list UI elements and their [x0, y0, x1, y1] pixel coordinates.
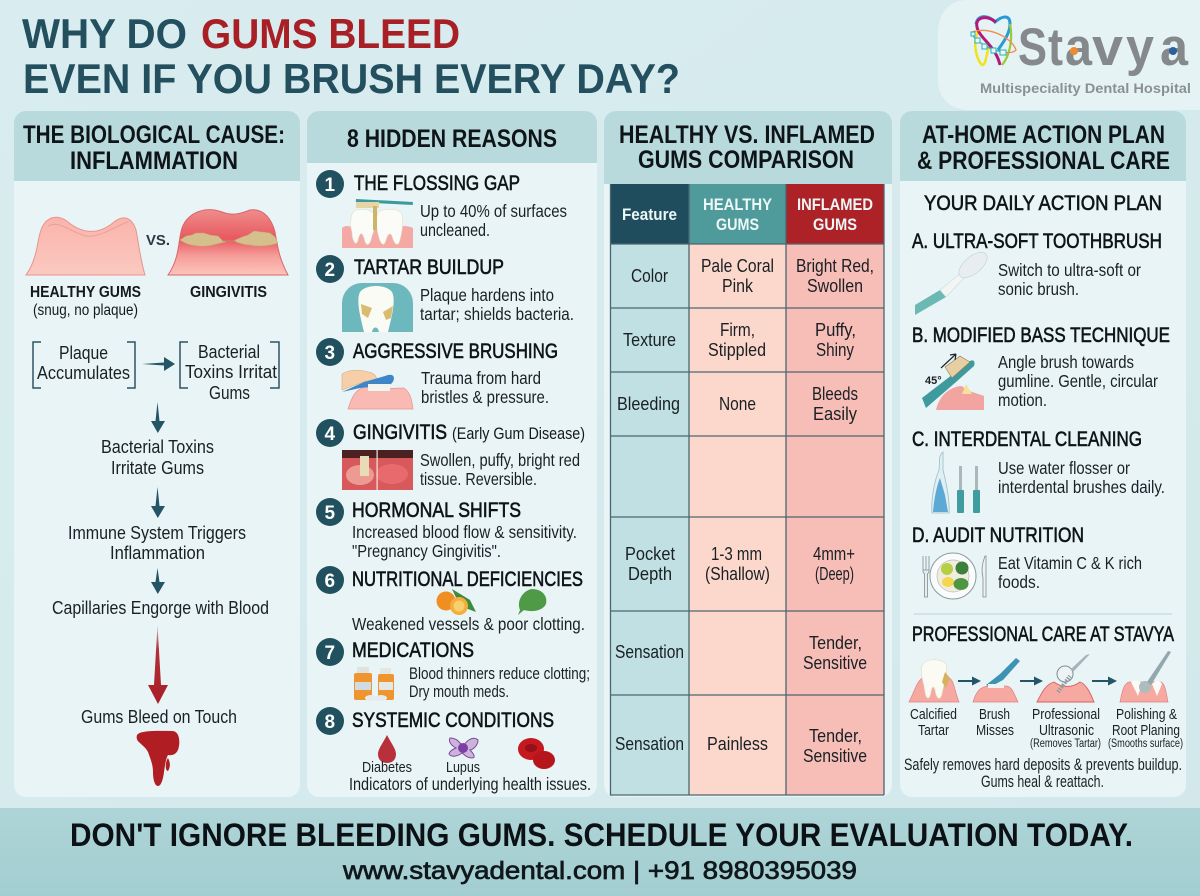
icon: brush at 45 degrees: 45°: [925, 375, 942, 387]
panel: the biological cause: [14, 111, 300, 797]
logo: Stavya Multispeciality Dental Hospital: t: [1048, 18, 1063, 77]
icon: brush at 45 degrees: [922, 354, 984, 410]
icon: blood drip: [137, 731, 179, 786]
icon: spinach: [518, 589, 546, 615]
arrow: down 2: [151, 487, 165, 518]
subheading: your daily action plan: YOUR DAILY ACTION PLAN: [924, 192, 1162, 215]
row: pocket depth: (Shallow): [705, 563, 770, 584]
heading: comparison: GUMS COMPARISON: [638, 146, 854, 174]
photo: inflamed gums: [342, 450, 413, 490]
text: immune system triggers inflammation: [68, 522, 246, 563]
text: capillaries engorge with blood: Capillaries Engorge with Blood: [52, 597, 269, 618]
title: [22, 10, 680, 102]
step 4: polishing and root planing: [1108, 651, 1183, 750]
step 3: professional ultrasonic: Ultrasonic: [1039, 722, 1094, 739]
reason 2: tartar buildup: [316, 255, 574, 332]
row: pocket depth: [625, 543, 855, 584]
row: sensation 2: Painless: [707, 733, 768, 754]
reason 7: medications: Dry mouth meds.: [409, 683, 509, 701]
arrow: to bacterial toxins: [142, 357, 175, 371]
icon: oranges: [436, 589, 476, 615]
row: bleeding: [617, 383, 858, 424]
row: color: Pink: [722, 275, 754, 296]
reason 5: hormonal shifts: "Pregnancy Gingivitis".: [352, 541, 501, 561]
step 4: polishing and root planing: Root Planing: [1112, 722, 1180, 739]
logo: Stavya Multispeciality Dental Hospital: [938, 0, 1200, 110]
row: texture: Texture: [623, 329, 676, 350]
row: bleeding: Bleeding: [617, 393, 680, 414]
step C: interdental cleaning: interdental brushes daily.: [998, 477, 1165, 497]
label: healthy gums: [30, 284, 141, 319]
table header row: HEALTHY: [703, 195, 773, 214]
step A: ultra-soft toothbrush: Switch to ultra-soft or: [998, 260, 1141, 280]
arrow: down 1: [151, 402, 165, 433]
row: pocket depth: 4mm+: [813, 543, 855, 564]
text: bacterial toxins irritate gums: Bacterial Toxins: [101, 436, 214, 457]
row: sensation 1: [615, 632, 867, 673]
step 3: professional ultrasonic: [1030, 654, 1101, 750]
heading: 8 hidden reasons: [307, 111, 597, 163]
step 4: polishing and root planing: (Smooths surface): [1108, 738, 1183, 750]
table header row: Feature: [622, 205, 677, 224]
text: professional care summary: Gums heal & reattach.: [981, 773, 1104, 791]
heading: the biological cause: INFLAMMATION: [70, 147, 238, 175]
logo: Stavya Multispeciality Dental Hospital: a: [1065, 18, 1092, 77]
reason 1: the flossing gap: uncleaned.: [420, 220, 490, 240]
step B: modified bass technique: [912, 324, 1170, 410]
flow box: plaque accumulates: Plaque: [59, 342, 108, 363]
arrow: step 1 to 2: [958, 676, 981, 686]
reason 1: the flossing gap: [316, 170, 567, 248]
footer call to action: [0, 808, 1200, 896]
icon: toothbrush: [915, 248, 991, 315]
icon: teeth and brush: [342, 199, 413, 248]
row: color: Pale Coral: [701, 255, 774, 276]
row: texture: Shiny: [816, 339, 855, 360]
reason 4: gingivitis: 4: [324, 424, 336, 445]
reason 2: tartar buildup: tartar; shields bacteria.: [420, 304, 574, 324]
reason 2: tartar buildup: 2: [324, 260, 335, 281]
reason 8: systemic conditions: 8: [324, 712, 335, 733]
reason 5: hormonal shifts: HORMONAL SHIFTS: [352, 499, 521, 522]
reason 7: medications: MEDICATIONS: [352, 639, 474, 662]
icon: lupus cell: [449, 738, 478, 758]
comparison table: [610, 184, 884, 795]
illustration: healthy gums: [26, 217, 145, 275]
flow box: plaque accumulates: Accumulates: [37, 362, 130, 383]
step 4: polishing and root planing: Polishing &: [1116, 706, 1177, 723]
logo: Stavya Multispeciality Dental Hospital: Multispeciality Dental Hospital: [980, 81, 1191, 96]
row: pocket depth: Depth: [628, 563, 672, 584]
text: bacterial toxins irritate gums: [101, 436, 214, 478]
step 2: brush misses: Brush: [979, 706, 1010, 723]
text: immune system triggers inflammation: Inflammation: [110, 542, 205, 563]
reason 3: aggressive brushing: [316, 338, 558, 409]
logo: Stavya Multispeciality Dental Hospital: v: [1092, 18, 1124, 77]
reason 8: systemic conditions: Lupus: [446, 759, 480, 776]
reason 8: systemic conditions: [316, 707, 591, 794]
label: healthy gums: (snug, no plaque): [33, 302, 138, 319]
row: sensation 2: [615, 725, 867, 766]
reason 7: medications: Blood thinners reduce clotting;: [409, 665, 590, 683]
reason 7: medications: [316, 638, 590, 701]
icon: hand brushing gums: [342, 370, 413, 409]
step 3: professional ultrasonic: Professional: [1032, 706, 1100, 723]
text: gums bleed on touch: Gums Bleed on Touch: [81, 706, 237, 727]
step D: audit nutrition: D. AUDIT NUTRITION: [912, 524, 1084, 547]
logo: Stavya Multispeciality Dental Hospital: S: [1018, 18, 1047, 77]
row: pocket depth: Pocket: [625, 543, 675, 564]
reason 8: systemic conditions: SYSTEMIC CONDITIONS: [352, 709, 554, 732]
row: color: Color: [631, 265, 668, 286]
text: bacterial toxins irritate gums: Irritate Gums: [111, 457, 204, 478]
step C: interdental cleaning: [912, 428, 1165, 513]
flow box: bacterial toxins irritate gums: Toxins Irritat: [185, 361, 277, 382]
heading: comparison: HEALTHY VS. INFLAMED: [619, 121, 875, 149]
table header row: INFLAMED: [797, 195, 873, 214]
row: texture: [623, 319, 856, 360]
arrow: step 2 to 3: [1020, 676, 1043, 686]
flow box: plaque accumulates: [33, 342, 135, 388]
reason 2: tartar buildup: TARTAR BUILDUP: [354, 256, 504, 279]
label: vs: VS.: [146, 232, 170, 249]
row: sensation 2: Sensation: [615, 733, 684, 754]
reason 7: medications: 7: [324, 643, 335, 664]
row: color: Swollen: [807, 275, 863, 296]
row: texture: Stippled: [708, 339, 766, 360]
panel: at-home action plan and professional care: [900, 111, 1186, 797]
table header row: [610, 184, 884, 244]
step 1: calcified tartar: Tartar: [918, 722, 949, 739]
reason 3: aggressive brushing: 3: [324, 343, 335, 364]
icon: plate with fork and knife: [923, 553, 986, 599]
reason 3: aggressive brushing: Trauma from hard: [421, 368, 541, 388]
reason 4: gingivitis: Swollen, puffy, bright red: [420, 450, 580, 470]
step D: audit nutrition: foods.: [998, 572, 1040, 592]
step 3: professional ultrasonic: (Removes Tartar): [1030, 738, 1101, 750]
footer call to action: DON'T IGNORE BLEEDING GUMS. SCHEDULE YOUR EVALUATION TODAY.: [70, 817, 1133, 853]
flow box: bacterial toxins irritate gums: Bacterial: [198, 341, 260, 362]
step D: audit nutrition: [912, 524, 1142, 599]
row: color: Bright Red,: [796, 255, 874, 276]
row: texture: Firm,: [720, 319, 755, 340]
row: bleeding: None: [719, 393, 756, 414]
reason 6: nutritional deficiencies: 6: [324, 571, 335, 592]
panel: healthy vs inflamed comparison: [604, 111, 892, 797]
icon: water flosser and interdental brushes: [932, 452, 980, 513]
flow box: bacterial toxins irritate gums: Gums: [209, 382, 250, 403]
reason 6: nutritional deficiencies: Weakened vessels & poor clotting.: [352, 614, 585, 634]
row: texture: Puffy,: [815, 319, 856, 340]
reason 5: hormonal shifts: Increased blood flow & sensitivity.: [352, 522, 577, 542]
title: WHY DO: [22, 10, 187, 57]
heading: the biological cause: [14, 111, 300, 181]
step C: interdental cleaning: C. INTERDENTAL CLEANING: [912, 428, 1142, 451]
step 2: brush misses: Misses: [976, 722, 1014, 739]
arrow: down 3: [151, 568, 165, 594]
reason 5: hormonal shifts: 5: [324, 503, 336, 524]
title: EVEN IF YOU BRUSH EVERY DAY?: [23, 55, 680, 102]
icon: medicine bottles: [354, 667, 394, 701]
row: color: [631, 255, 874, 296]
step 1: calcified tartar: [909, 660, 959, 739]
reason 4: gingivitis: tissue. Reversible.: [420, 469, 537, 489]
logo: Stavya Multispeciality Dental Hospital: a: [1160, 18, 1188, 77]
title: GUMS BLEED: [201, 10, 460, 57]
arrow: red down: [148, 625, 168, 704]
reason 1: the flossing gap: 1: [324, 175, 336, 196]
flow box: bacterial toxins irritate gums: [180, 341, 279, 403]
step C: interdental cleaning: Use water flosser or: [998, 458, 1130, 478]
step D: audit nutrition: Eat Vitamin C & K rich: [998, 553, 1142, 573]
row: pocket depth: 1-3 mm: [711, 543, 762, 564]
reason 5: hormonal shifts: [316, 498, 577, 561]
footer call to action: www.stavyadental.com | +91 8980395039: [342, 857, 857, 885]
reason 3: aggressive brushing: AGGRESSIVE BRUSHING: [353, 340, 558, 363]
arrow: step 3 to 4: [1092, 676, 1117, 686]
heading: action plan: [900, 111, 1186, 181]
table grid: [610, 184, 884, 795]
table column fills: [610, 244, 884, 795]
reason 6: nutritional deficiencies: NUTRITIONAL DEFICIENCIES: [352, 568, 583, 591]
heading: comparison: [604, 111, 892, 184]
text: immune system triggers inflammation: Immune System Triggers: [68, 522, 246, 543]
step A: ultra-soft toothbrush: [912, 230, 1162, 315]
row: bleeding: Easily: [813, 403, 858, 424]
panel: 8 hidden reasons: [307, 111, 597, 797]
icon: blood drop: [378, 735, 396, 763]
row: sensation 1: Tender,: [809, 632, 862, 653]
table header row: GUMS: [716, 215, 759, 234]
logo: Stavya Multispeciality Dental Hospital: y: [1126, 18, 1154, 77]
label: healthy gums: HEALTHY GUMS: [30, 284, 141, 301]
reason 4: gingivitis: (Early Gum Disease): [452, 425, 585, 443]
row: bleeding: Bleeds: [812, 383, 858, 404]
row: sensation 2: Sensitive: [803, 745, 867, 766]
heading: 8 hidden reasons: 8 HIDDEN REASONS: [347, 125, 557, 153]
reason 3: aggressive brushing: bristles & pressure.: [421, 387, 549, 407]
row: pocket depth: (Deep): [815, 563, 854, 584]
reason 2: tartar buildup: Plaque hardens into: [420, 285, 554, 305]
reason 8: systemic conditions: Indicators of underlying health issues.: [349, 774, 591, 794]
reason 8: systemic conditions: Diabetes: [362, 759, 412, 776]
label: gingivitis: GINGIVITIS: [190, 284, 267, 301]
step B: modified bass technique: gumline. Gentle, circular: [998, 371, 1158, 391]
step B: modified bass technique: Angle brush towards: [998, 352, 1134, 372]
table header row: GUMS: [813, 215, 857, 234]
row: sensation 1: Sensitive: [803, 652, 867, 673]
reason 4: gingivitis: GINGIVITIS: [353, 421, 447, 444]
row: sensation 2: Tender,: [809, 725, 862, 746]
row: sensation 1: Sensation: [615, 641, 684, 662]
icon: tooth with tartar: [342, 283, 413, 332]
step 2: brush misses: [973, 658, 1020, 739]
illustration: gingivitis gums: [168, 210, 288, 275]
reason 1: the flossing gap: THE FLOSSING GAP: [354, 172, 520, 195]
text: professional care summary: [904, 756, 1182, 791]
icon: red blood cells: [518, 738, 555, 769]
step A: ultra-soft toothbrush: sonic brush.: [998, 279, 1079, 299]
heading: the biological cause: THE BIOLOGICAL CAUSE:: [23, 121, 285, 149]
reason 4: gingivitis: [316, 419, 585, 490]
reason 6: nutritional deficiencies: [316, 566, 585, 634]
step 1: calcified tartar: Calcified: [910, 706, 957, 723]
reason 1: the flossing gap: Up to 40% of surfaces: [420, 201, 567, 221]
step B: modified bass technique: motion.: [998, 390, 1047, 410]
